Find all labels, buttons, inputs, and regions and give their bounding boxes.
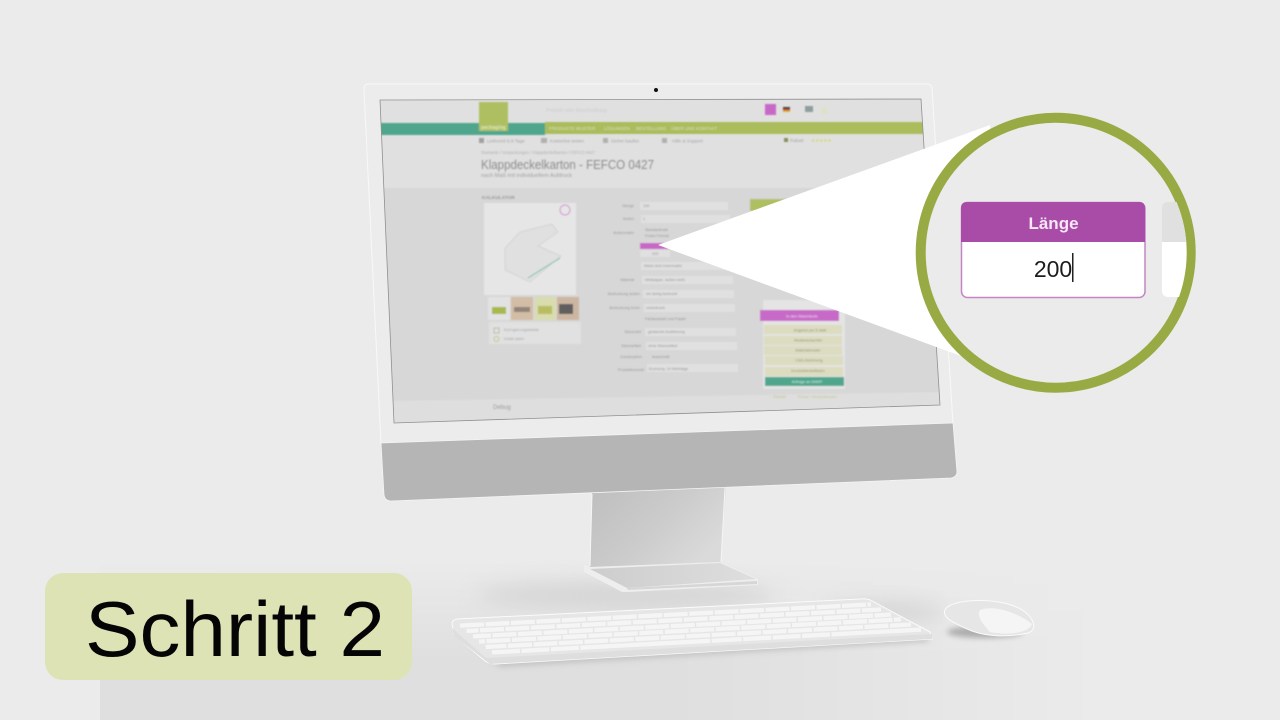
- form values: 100: [643, 204, 649, 208]
- nav labels: LÖSUNGEN: [604, 125, 630, 131]
- result panel: Musterschachtel: [794, 338, 822, 342]
- mouse: [944, 600, 1034, 636]
- result panel: Angebot per E-Mail: [794, 328, 826, 332]
- neighbouring input card: [1162, 202, 1187, 297]
- nav labels: MUSTER: [576, 126, 596, 131]
- label: Länge: Länge: [1028, 214, 1079, 233]
- service row: Lieferzeit 5-8 Tage: [487, 138, 525, 144]
- key rows: [460, 604, 921, 652]
- form values: Freies Format: [645, 234, 670, 238]
- result panel: Anfrage an DMKP: [792, 380, 823, 384]
- form values: 1: [643, 217, 645, 221]
- length input card: [961, 202, 1145, 298]
- breadcrumb: Startseite / Verpackungen / Klappdeckelkarton / FEFCO 0427: [481, 150, 596, 155]
- nav labels: KONTAKT: [696, 126, 718, 131]
- form labels: Stanzartikel: [621, 344, 641, 348]
- length header: [640, 243, 670, 249]
- logo: [479, 102, 508, 131]
- screen: Preise / Versandkosten: [798, 395, 837, 399]
- service row: Rabatt: [790, 138, 804, 143]
- monitor bezel: [364, 84, 953, 444]
- search text: Produkt oder Beschreibung: [546, 108, 607, 114]
- image panel footer: [490, 323, 580, 343]
- form values: ohne Stanzartikel: [648, 344, 677, 348]
- infographic canvas: [45, 84, 1196, 720]
- image panel footer: Korrugierungsdetails: [504, 328, 539, 332]
- desk surface: [100, 630, 804, 720]
- text cursor: [1072, 253, 1074, 282]
- value: 200: 200: [1034, 256, 1072, 282]
- form labels: Produktionszeit: [618, 368, 645, 372]
- flag icon: [783, 107, 790, 112]
- nav labels: [549, 125, 718, 131]
- nav labels: PRODUKTE: [549, 126, 575, 131]
- result panel: CAD-Zeichnung: [795, 358, 823, 362]
- monitor chin: [381, 423, 957, 501]
- result panel: [750, 199, 845, 389]
- nav bar teal: [375, 123, 545, 135]
- form labels: Zusatzoption: [620, 355, 642, 359]
- desk shadows: [470, 581, 1023, 667]
- page background lower: [384, 189, 938, 400]
- thumbnails: [488, 297, 579, 320]
- form values: Wellpappe, außen weiß: [645, 278, 685, 282]
- monitor: [364, 84, 957, 501]
- form labels: Sorten: [623, 217, 634, 221]
- service row: Sicher kaufen: [611, 138, 640, 144]
- step badge: [45, 573, 412, 680]
- form values: Standardmaß: [645, 228, 669, 232]
- page title: Klappdeckelkarton - FEFCO 0427: [481, 157, 654, 172]
- service row: [479, 138, 832, 144]
- form values: [643, 204, 688, 371]
- service row: Hilfe & Support: [672, 138, 704, 144]
- service row: Kostenlos testen: [550, 138, 584, 144]
- form values: Maße sind Innenmaße: [644, 264, 682, 268]
- camera: [654, 88, 658, 92]
- nav labels: BESTELLUNG: [636, 126, 667, 131]
- form values: Ausschnitt: [652, 355, 670, 359]
- keyboard: [452, 599, 932, 664]
- form labels: Außenmaße: [613, 231, 634, 235]
- magnifier circle: [921, 118, 1222, 388]
- form labels: Material: [620, 278, 634, 282]
- form values: unbedruckt: [646, 306, 666, 310]
- footer links: Rabatte: [773, 395, 786, 399]
- nav labels: ÜBER UNS: [671, 125, 695, 131]
- monitor stand: [584, 486, 758, 592]
- form fields: [640, 202, 738, 372]
- result panel: Druckdatenleitfaden: [791, 369, 825, 373]
- logo: packaging: [481, 125, 506, 131]
- product image panel: [484, 203, 576, 295]
- account icon: [765, 104, 776, 115]
- service row: ★★★★★: [811, 138, 832, 143]
- form labels: [608, 204, 645, 372]
- card header: [961, 202, 1145, 242]
- step label: Schritt 2: [85, 585, 385, 673]
- image panel footer: Detail laden: [504, 337, 524, 341]
- calculator heading: KALKULATOR: [482, 195, 515, 201]
- result panel: In den Warenkorb: [786, 314, 818, 318]
- stand foot: [584, 562, 758, 592]
- form labels: Menge: [622, 204, 634, 208]
- user icon: [822, 107, 827, 114]
- page subtitle: nach Maß mit individuellem Aufdruck: [481, 173, 572, 179]
- screen: [375, 99, 945, 430]
- form labels: Stanzzahl: [624, 330, 641, 334]
- callout beam: [658, 125, 1000, 370]
- cart icon: [805, 106, 813, 112]
- form labels: Bedruckung außen: [608, 292, 640, 296]
- form values: Economy, 10 Werktage: [649, 367, 688, 371]
- form values: ein farbig bedruckt: [646, 292, 678, 296]
- result panel: Materialmuster: [795, 348, 821, 352]
- form values: Farbauswahl und Papier: [645, 317, 687, 321]
- nav bar lime: [545, 122, 925, 134]
- form labels: Bedruckung innen: [609, 306, 640, 310]
- form values: 200: [652, 252, 658, 256]
- debug label: Debug: [493, 405, 511, 411]
- form values: gestanzte Ausführung: [648, 330, 685, 334]
